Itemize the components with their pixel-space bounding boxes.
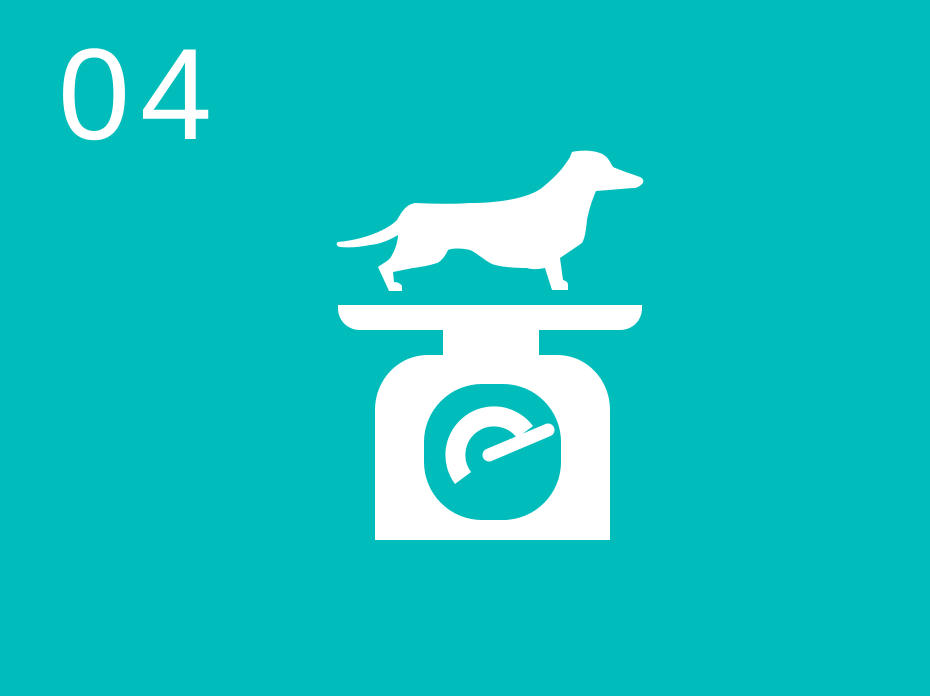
- scale body: [375, 355, 610, 540]
- scale platform: [338, 305, 642, 330]
- title number: 04: [58, 21, 222, 167]
- dial needle: [489, 430, 548, 455]
- scale stem: [443, 328, 539, 357]
- icon: dachshund: [337, 151, 643, 291]
- dial arc: [455, 416, 525, 478]
- icon: scale: [338, 305, 642, 540]
- scale dial: [424, 384, 561, 520]
